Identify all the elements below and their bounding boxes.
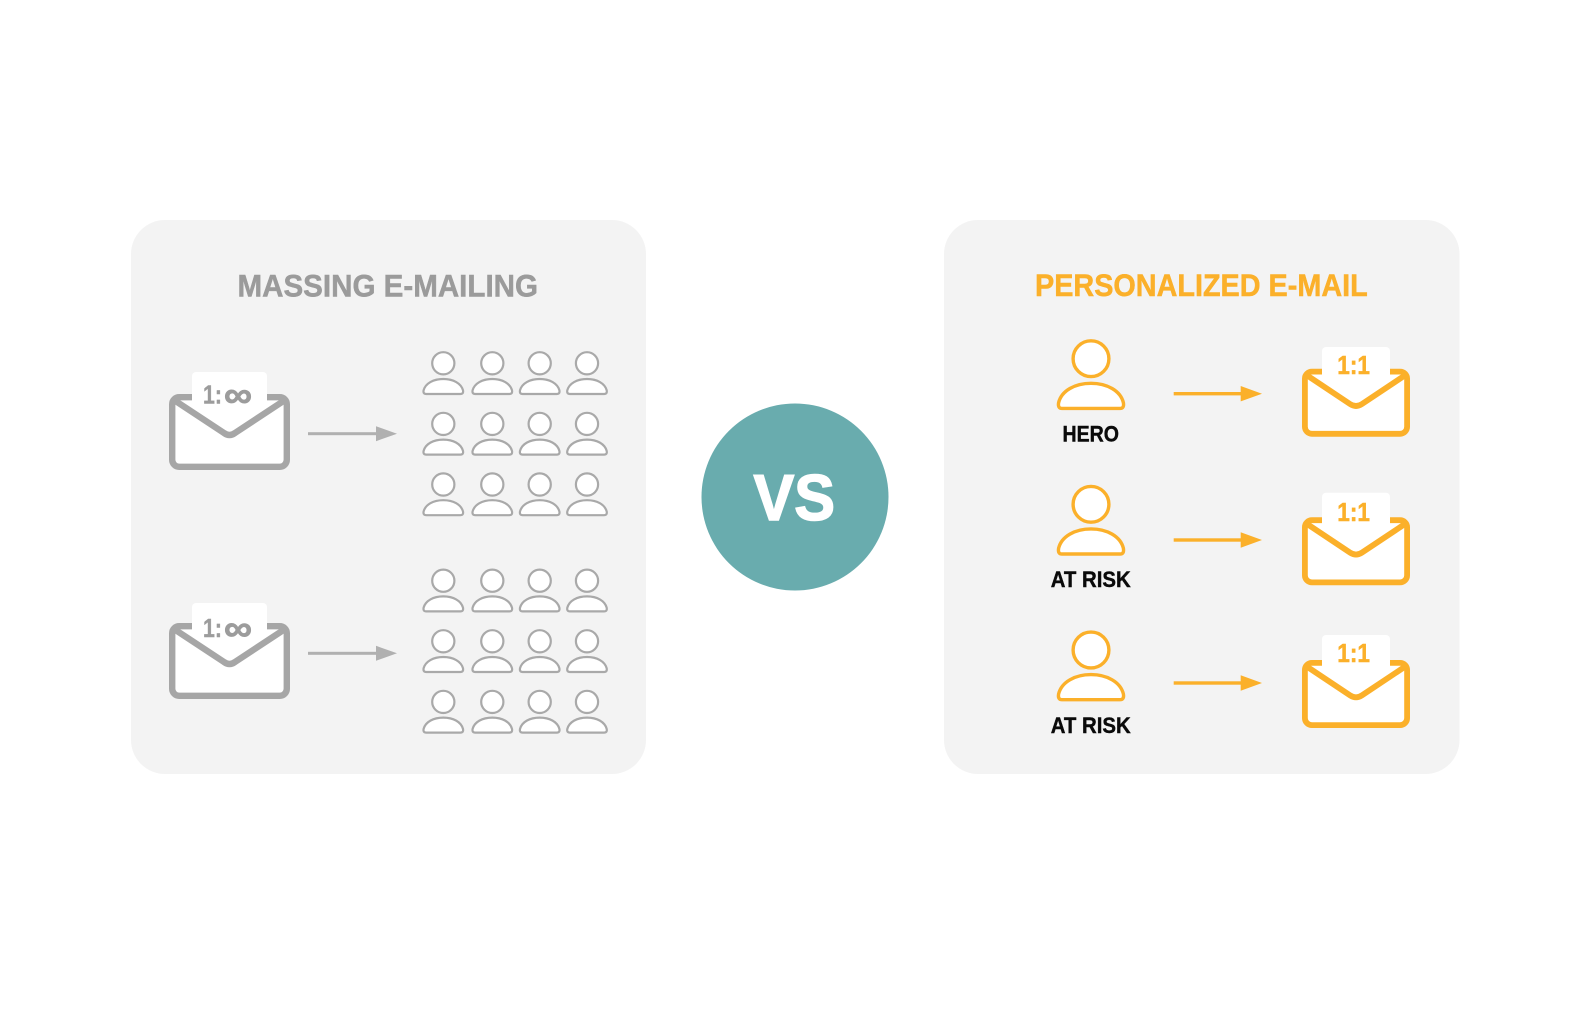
row: hero xyxy=(1058,341,1407,447)
icon: at risk person xyxy=(1058,632,1124,700)
icon: envelope 1:1 xyxy=(1305,347,1407,434)
panel: personalized e-mail xyxy=(944,220,1460,774)
icon: envelope 1:1: 1:1 xyxy=(1337,638,1370,668)
icon: hero person xyxy=(1058,341,1124,408)
panel: massing e-mailing xyxy=(131,220,646,774)
vs badge: VS xyxy=(754,461,835,534)
arrow: hero to envelope xyxy=(1174,386,1262,401)
arrow: envelope 1 to recipients xyxy=(308,426,397,441)
recipients group 2 xyxy=(423,570,607,733)
icon: mass envelope 2: 1: xyxy=(203,613,222,643)
arrow: envelope 2 to recipients xyxy=(308,646,397,661)
heading: personalized e-mail: PERSONALIZED E-MAIL xyxy=(1035,267,1368,303)
row: at risk 1 xyxy=(1051,486,1407,592)
icon: envelope 1:1: 1:1 xyxy=(1337,350,1370,380)
icon: envelope 1:1: 1:1 xyxy=(1337,497,1370,527)
icon: mass envelope 1: ∞ xyxy=(224,374,252,415)
recipients group 1 xyxy=(423,352,607,515)
icon: mass envelope 1 xyxy=(172,372,287,467)
icon: mass envelope 2: ∞ xyxy=(224,608,252,649)
arrow: at risk to envelope xyxy=(1174,532,1262,548)
heading: massing e-mailing: MASSING E-MAILING xyxy=(238,268,538,304)
icon: envelope 1:1 xyxy=(1305,493,1407,582)
icon: mass envelope 2 xyxy=(172,603,287,696)
label: at risk: AT RISK xyxy=(1051,713,1131,738)
icon: mass envelope 1: 1: xyxy=(203,379,222,409)
vs badge xyxy=(702,404,888,590)
icon: at risk person xyxy=(1058,486,1124,554)
label: at risk: AT RISK xyxy=(1051,567,1131,592)
label: hero: HERO xyxy=(1062,422,1119,447)
arrow: at risk to envelope xyxy=(1174,675,1262,691)
row: at risk 2 xyxy=(1051,632,1407,738)
icon: envelope 1:1 xyxy=(1305,635,1407,725)
